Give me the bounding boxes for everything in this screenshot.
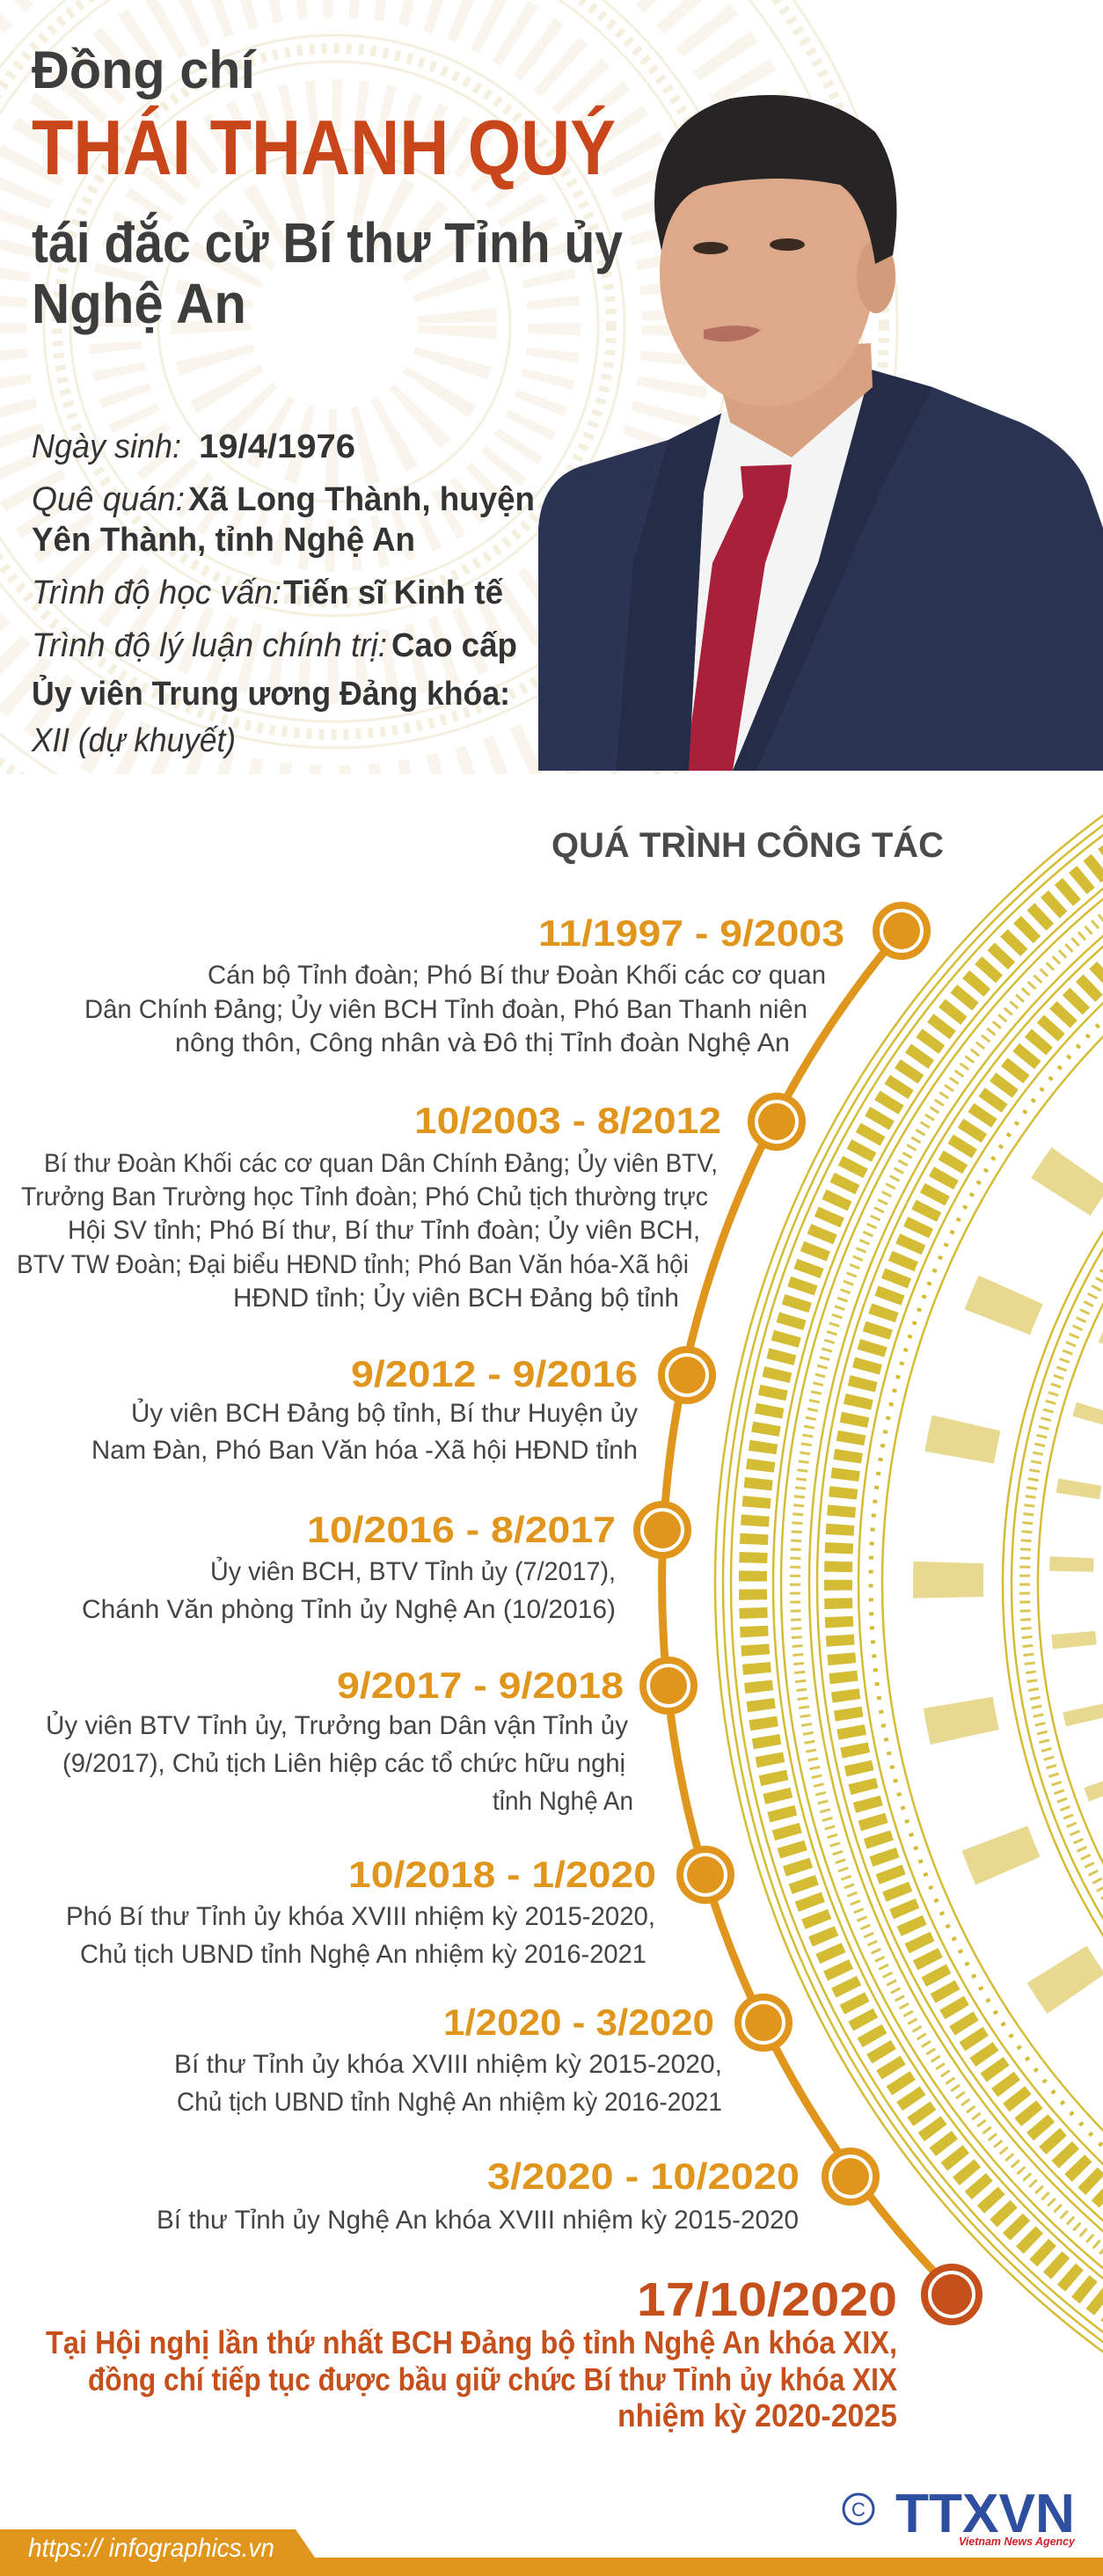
info block: 19/4/1976 — [199, 428, 355, 465]
footer band — [0, 2529, 1103, 2576]
info block: Ủy viên Trung ương Đảng khóa: — [32, 674, 510, 713]
entry 2: Trưởng Ban Trường học Tỉnh đoàn; Phó Chủ tịch thường trực — [21, 1182, 708, 1211]
entry 3: Ủy viên BCH Đảng bộ tỉnh, Bí thư Huyện ủy — [131, 1398, 638, 1428]
entry 6: Phó Bí thư Tỉnh ủy khóa XVIII nhiệm kỳ 2015-2020, — [66, 1902, 655, 1931]
entry 9: highlight: đồng chí tiếp tục được bầu giữ chức Bí thư Tỉnh ủy khóa XIX — [88, 2361, 897, 2397]
entry 9: highlight — [46, 2273, 897, 2433]
logo: TTXVN: C — [851, 2499, 866, 2521]
photo: portrait — [538, 95, 1103, 771]
entry 2: Hội SV tỉnh; Phó Bí thư, Bí thư Tỉnh đoàn; Ủy viên BCH, — [68, 1215, 700, 1245]
entry 5 — [46, 1665, 633, 1816]
entry 5: 9/2017 - 9/2018 — [337, 1665, 624, 1706]
entry 4: Ủy viên BCH, BTV Tỉnh ủy (7/2017), — [210, 1556, 616, 1586]
subtitle: tái đắc cử Bí thư Tỉnh ủy — [32, 211, 623, 274]
subtitle: Nghệ An — [32, 272, 246, 335]
entry 4 — [82, 1509, 616, 1624]
entry 5: tỉnh Nghệ An — [493, 1787, 633, 1816]
title: Đồng chí: Đồng chí — [32, 40, 257, 99]
entry 7: Chủ tịch UBND tỉnh Nghệ An nhiệm kỳ 2016-2021 — [177, 2088, 722, 2117]
entry 3: 9/2012 - 9/2016 — [351, 1353, 638, 1394]
entry 9: highlight: 17/10/2020 — [637, 2273, 897, 2326]
info block: XII (dự khuyết) — [31, 722, 236, 759]
entry 8 — [157, 2155, 800, 2235]
entry 9: highlight: nhiệm kỳ 2020-2025 — [617, 2397, 897, 2433]
entry 5: (9/2017), Chủ tịch Liên hiệp các tổ chức hữu nghị — [62, 1749, 625, 1778]
title: name: THÁI THANH QUÝ — [32, 104, 616, 191]
entry 8: Bí thư Tỉnh ủy Nghệ An khóa XVIII nhiệm kỳ 2015-2020 — [157, 2206, 799, 2235]
info block — [31, 428, 535, 759]
subtitle — [32, 211, 623, 335]
entry 4: Chánh Văn phòng Tỉnh ủy Nghệ An (10/2016) — [82, 1595, 616, 1624]
entry 7: 1/2020 - 3/2020 — [443, 2002, 714, 2043]
entry 7: Bí thư Tỉnh ủy khóa XVIII nhiệm kỳ 2015-2020, — [174, 2050, 722, 2079]
entry 3: Nam Đàn, Phó Ban Văn hóa -Xã hội HĐND tỉnh — [91, 1436, 638, 1465]
entry 9: highlight: Tại Hội nghị lần thứ nhất BCH Đảng bộ tỉnh Nghệ An khóa XIX, — [46, 2324, 897, 2360]
entry 1: Cán bộ Tỉnh đoàn; Phó Bí thư Đoàn Khối các cơ quan — [208, 961, 826, 990]
info block: Ngày sinh: — [32, 428, 181, 465]
entry 4: 10/2016 - 8/2017 — [307, 1509, 616, 1550]
entry 6: 10/2018 - 1/2020 — [348, 1854, 656, 1895]
entry 1 — [84, 912, 844, 1057]
entry 7 — [174, 2002, 722, 2117]
timeline arc — [662, 931, 956, 2294]
info block: Trình độ học vấn: — [32, 574, 281, 611]
footer band: https:// infographics.vn — [28, 2534, 274, 2563]
background: bronze drum — [714, 814, 1103, 2353]
info block: Quê quán: — [32, 481, 185, 518]
section heading: QUÁ TRÌNH CÔNG TÁC — [552, 824, 944, 865]
info block: Xã Long Thành, huyện — [188, 481, 535, 518]
info block: Tiến sĩ Kinh tế — [283, 574, 504, 611]
entry 6: Chủ tịch UBND tỉnh Nghệ An nhiệm kỳ 2016-2021 — [80, 1940, 646, 1969]
background: faint drum pattern — [0, 0, 899, 774]
entry 5: Ủy viên BTV Tỉnh ủy, Trưởng ban Dân vận Tỉnh ủy — [46, 1710, 628, 1740]
entry 6 — [66, 1854, 656, 1969]
entry 1: 11/1997 - 9/2003 — [538, 912, 844, 954]
info block: Trình độ lý luận chính trị: — [32, 627, 387, 664]
info block: Yên Thành, tỉnh Nghệ An — [32, 522, 415, 559]
entry 3 — [91, 1353, 638, 1465]
entry 2: BTV TW Đoàn; Đại biểu HĐND tỉnh; Phó Ban Văn hóa-Xã hội — [17, 1250, 689, 1279]
logo: TTXVN: Vietnam News Agency — [959, 2535, 1076, 2548]
entry 1: Dân Chính Đảng; Ủy viên BCH Tỉnh đoàn, Phó Ban Thanh niên — [84, 994, 807, 1024]
info block: Cao cấp — [391, 627, 517, 664]
entry 2: 10/2003 - 8/2012 — [414, 1100, 721, 1141]
entry 2 — [17, 1100, 721, 1313]
entry 1: nông thôn, Công nhân và Đô thị Tỉnh đoàn Nghệ An — [175, 1028, 790, 1057]
entry 2: Bí thư Đoàn Khối các cơ quan Dân Chính Đảng; Ủy viên BTV, — [44, 1148, 718, 1178]
entry 8: 3/2020 - 10/2020 — [487, 2155, 800, 2197]
timeline nodes — [637, 905, 979, 2322]
logo: TTXVN: TTXVN — [895, 2484, 1075, 2544]
entry 2: HĐND tỉnh; Ủy viên BCH Đảng bộ tỉnh — [233, 1283, 679, 1313]
